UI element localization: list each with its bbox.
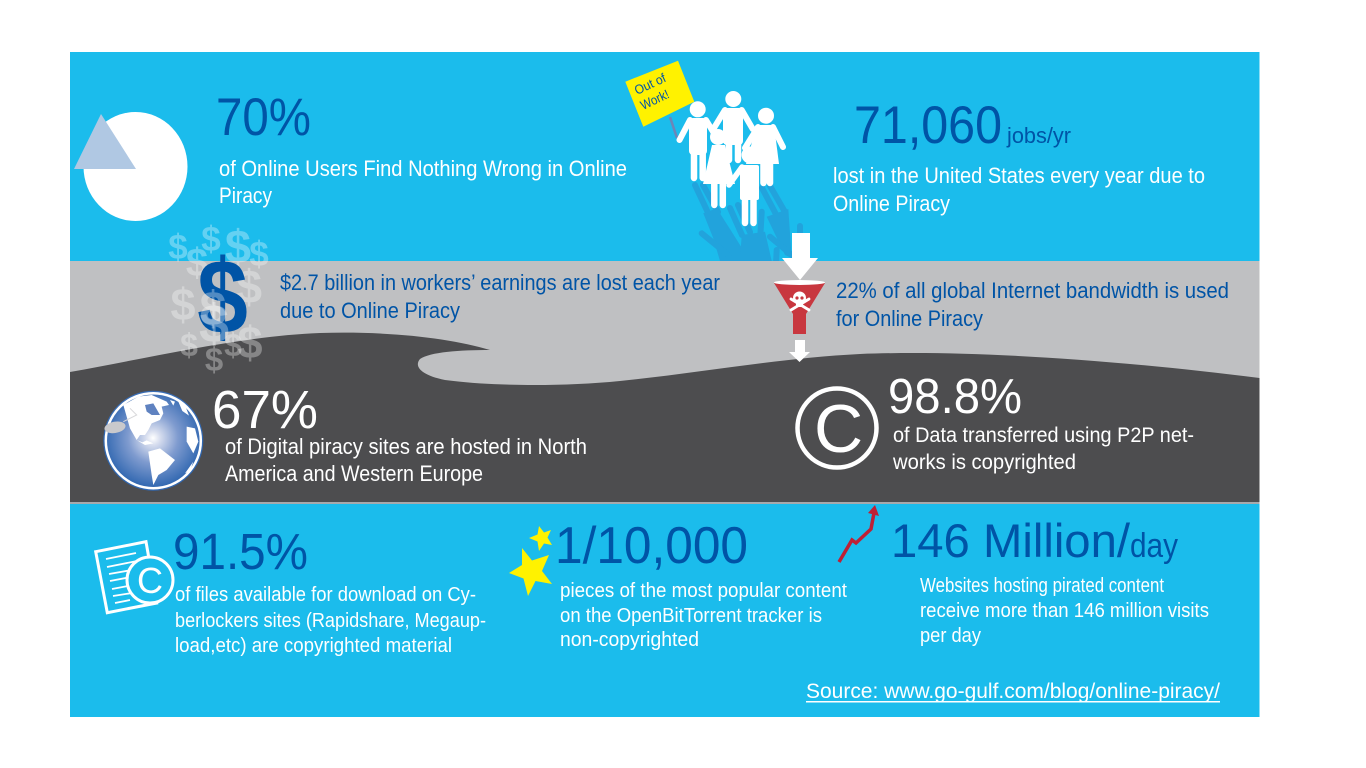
icon: dollar signs: $ [225, 220, 251, 273]
text: online users [219, 156, 627, 208]
icon: protest sign: Work! [638, 86, 671, 113]
stat: 91.5 percent: 91.5% [173, 523, 308, 580]
icon: pie chart [74, 112, 188, 221]
arrow: into funnel [782, 233, 818, 280]
text: website visits [920, 575, 1209, 647]
text: cyberlockers [175, 584, 486, 657]
panel: bottom blue section [70, 502, 1260, 717]
icon: dollar signs: $ [236, 260, 262, 313]
icon: document with copyright [96, 542, 173, 613]
icon: globe [103, 391, 203, 491]
stat: 98.8 percent: 98.8% [888, 370, 1022, 424]
text: hosted sites: America and Western Europe [225, 461, 483, 486]
text: website visits: Websites hosting pirated content [920, 575, 1164, 597]
icon: copyright symbol: C [814, 391, 863, 467]
text: P2P data [892, 424, 1194, 474]
icon: dollar signs: $ [237, 317, 263, 368]
icon: dollar signs: $ [199, 294, 229, 354]
text: hosted sites [225, 434, 587, 486]
text: online users: of Online Users Find Nothing Wrong in Online [219, 156, 627, 181]
text: workers earnings: $2.7 billion in workers’ earnings are lost each year [280, 270, 720, 295]
text: cyberlockers: berlockers sites (Rapidshare, Megaup- [175, 610, 486, 632]
text: jobs lost [833, 163, 1205, 216]
text: P2P data: works is copyrighted [892, 451, 1076, 474]
stat: 146 million per day: day [1130, 527, 1178, 565]
text: website visits: receive more than 146 million visits [920, 600, 1209, 622]
text: P2P data: of Data transferred using P2P net- [893, 424, 1194, 447]
icon: protest sign [625, 61, 694, 138]
text: jobs lost: Online Piracy [833, 191, 950, 216]
text: cyberlockers: of files available for download on Cy- [175, 584, 476, 606]
icon: shadows of people [695, 185, 800, 264]
text: OpenBitTorrent: non-copyrighted [560, 629, 699, 651]
text: bandwidth [836, 278, 1229, 331]
text: OpenBitTorrent: pieces of the most popular content [560, 580, 847, 602]
text: hosted sites: of Digital piracy sites are hosted in North [225, 434, 587, 459]
icon: dollar signs: $ [249, 235, 269, 274]
stat: 146 million per day: 146 Million/ [891, 514, 1131, 567]
icon: dollar signs: $ [205, 341, 223, 378]
stat: 1/10,000: 1/10,000 [555, 517, 748, 575]
text: OpenBitTorrent [560, 580, 847, 651]
text: cyberlockers: load,etc) are copyrighted material [175, 635, 452, 657]
icon: dollar signs: $ [200, 283, 227, 336]
icon: funnel with skull [774, 280, 825, 334]
icon: yellow stars [509, 526, 552, 596]
text: bandwidth: 22% of all global Internet bandwidth is used [836, 278, 1229, 303]
stat: 67 percent: 67% [212, 380, 318, 440]
stat: 71,060 jobs per year: jobs/yr [1006, 123, 1071, 148]
icon: dollar signs: $ [180, 327, 198, 363]
icon: copyright symbol [798, 388, 876, 468]
source link text: Source: www.go-gulf.com/blog/online-piracy/ [806, 680, 1220, 703]
icon: dollar signs: $ [168, 228, 188, 267]
panel: dark wave section [70, 333, 1260, 502]
text: jobs lost: lost in the United States every year due to [833, 163, 1205, 188]
icon: group of people [680, 91, 783, 223]
arrow: out of funnel [789, 340, 810, 362]
icon: red rising arrow [839, 505, 879, 562]
text: bandwidth: for Online Piracy [836, 306, 983, 331]
stat: 71,060 jobs per year: 71,060 [854, 96, 1002, 155]
stat: 70 percent: 70% [216, 88, 311, 147]
icon: dollar signs: $ [197, 238, 248, 356]
text: workers earnings: due to Online Piracy [280, 298, 460, 323]
text: OpenBitTorrent: on the OpenBitTorrent tracker is [560, 605, 822, 627]
text: website visits: per day [920, 625, 981, 647]
icon: document with copyright: C [137, 560, 163, 601]
icon: dollar signs [168, 220, 269, 378]
panel: grey middle section [70, 261, 1260, 386]
icon: dollar signs: $ [170, 279, 196, 330]
icon: dollar signs: $ [224, 327, 242, 363]
icon: dollar signs: $ [186, 241, 208, 285]
icon: dollar signs: $ [201, 220, 221, 259]
panel: top blue section [70, 52, 1260, 261]
text: online users: Piracy [219, 183, 272, 208]
icon: protest sign: Out of [632, 70, 668, 98]
text: workers earnings [280, 270, 720, 323]
